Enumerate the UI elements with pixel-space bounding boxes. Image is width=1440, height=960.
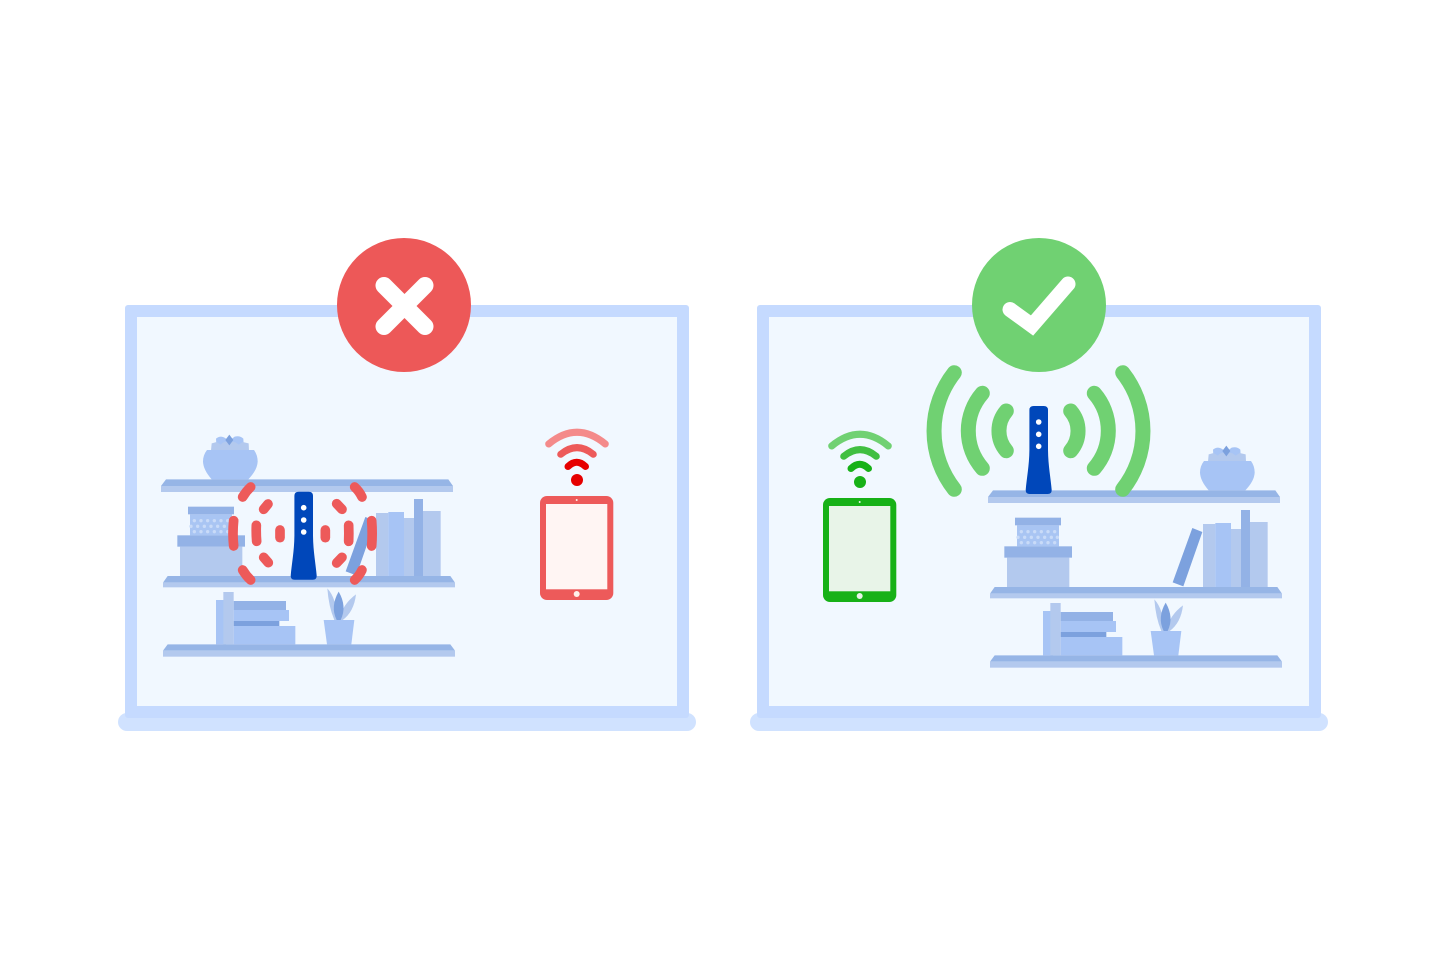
screen frame — [125, 305, 689, 718]
book pile — [216, 592, 295, 644]
tablet: red — [540, 496, 613, 600]
screen background — [769, 317, 1309, 706]
top shelf — [988, 490, 1280, 503]
middle shelf — [163, 576, 455, 587]
shelves with objects — [161, 435, 455, 657]
router: blue — [1026, 406, 1052, 494]
stacked boxes — [177, 507, 245, 576]
badge: cross — [337, 238, 471, 372]
potted succulent — [1200, 446, 1255, 490]
bottom shelf — [990, 655, 1282, 668]
leaning book — [346, 517, 375, 575]
router: blue — [291, 492, 317, 580]
book pile — [1043, 603, 1122, 655]
upright books — [1203, 510, 1268, 587]
laptop base — [750, 713, 1328, 731]
stacked boxes — [1004, 518, 1072, 587]
weak broken signal — [233, 487, 372, 580]
plant — [324, 588, 356, 644]
laptop base — [118, 713, 696, 731]
middle shelf — [990, 587, 1282, 598]
plant — [1151, 599, 1183, 655]
shelves with objects — [988, 446, 1282, 668]
screen background — [137, 317, 677, 706]
badge: check — [972, 238, 1106, 372]
strong wifi symbol — [832, 434, 888, 488]
leaning book — [1173, 528, 1202, 586]
bottom shelf — [163, 644, 455, 657]
panel: bad placement — [118, 238, 696, 731]
top shelf — [161, 479, 453, 492]
upright books — [376, 499, 441, 576]
screen frame — [757, 305, 1321, 718]
strong signal arcs — [934, 373, 1143, 489]
potted succulent — [203, 435, 258, 479]
panel: good placement — [750, 238, 1328, 731]
tablet: green — [823, 498, 896, 602]
weak wifi symbol — [549, 432, 605, 486]
